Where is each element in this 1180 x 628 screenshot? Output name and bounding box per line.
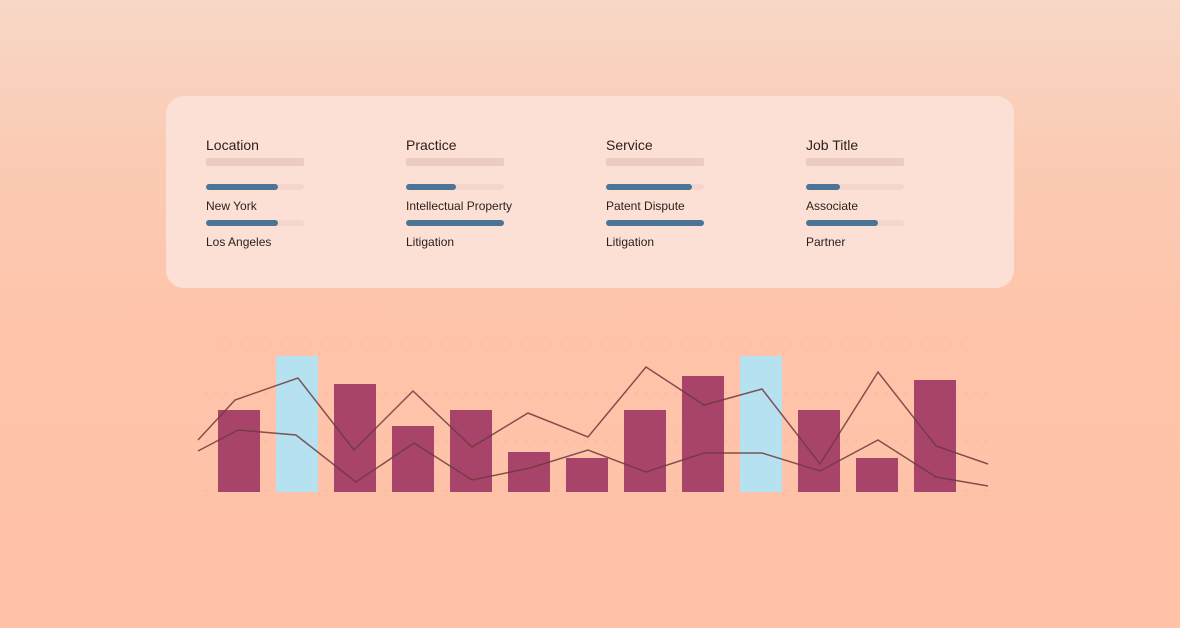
- column: Practice: Litigation: [406, 235, 454, 249]
- column: Service: Patent Dispute: [606, 199, 685, 213]
- column: Location: Location: [206, 137, 259, 153]
- column: Job Title: [806, 137, 904, 249]
- bars: [218, 356, 956, 492]
- column: Location: [206, 137, 304, 249]
- column: Job Title: Job Title: [806, 137, 858, 153]
- column: Practice: [406, 137, 512, 249]
- column: Practice: Practice: [406, 137, 457, 153]
- line series: [198, 367, 988, 486]
- column: Service: Service: [606, 137, 653, 153]
- column: Service: [606, 137, 704, 249]
- column: Job Title: Partner: [806, 235, 845, 249]
- column: Practice: Intellectual Property: [406, 199, 512, 213]
- column: Location: New York: [206, 199, 257, 213]
- column: Job Title: Associate: [806, 199, 858, 213]
- column: Service: Litigation: [606, 235, 654, 249]
- column: Location: Los Angeles: [206, 235, 271, 249]
- filter panel: [166, 96, 1014, 288]
